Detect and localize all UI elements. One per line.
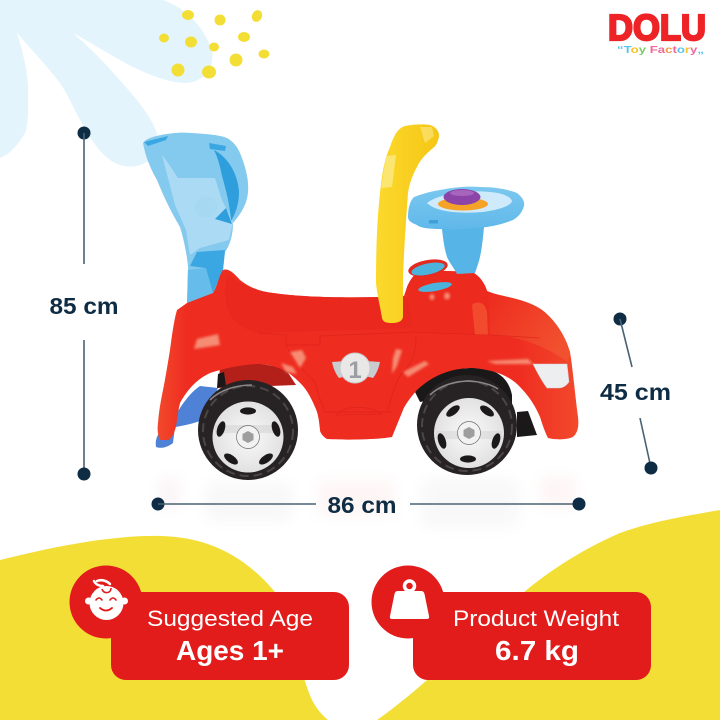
- body gloss highlights: [194, 292, 533, 377]
- winged number emblem: [332, 353, 380, 384]
- logo: Dolu Toy Factory: “T oy Fa ctory„: [617, 44, 704, 56]
- dimension: height 85 cm: 85 cm: [50, 293, 118, 319]
- dark inner rear wheel well: [218, 362, 296, 388]
- recessed red seat: [225, 274, 413, 333]
- blue steering column: [442, 227, 484, 274]
- card: suggested age: [70, 566, 349, 680]
- logo: Dolu Toy Factory: DOLU: [608, 7, 706, 48]
- toy ride-on car: [143, 124, 578, 480]
- card: suggested age: Suggested Age: [147, 606, 313, 631]
- rear wheel: [198, 380, 298, 480]
- bonnet panel: [487, 291, 570, 362]
- background: yellow wave bottom right: [377, 510, 720, 720]
- headlight: [533, 364, 569, 388]
- steering wheel: [408, 187, 524, 230]
- rear wheel-well shadow: [217, 372, 226, 388]
- red car body: [158, 269, 578, 440]
- card: product weight: Product Weight: [453, 606, 619, 631]
- rear blue platform: [156, 386, 218, 448]
- background: light blue flower petals: [0, 0, 212, 167]
- faint floor reflection of the toy: [158, 476, 576, 528]
- dimension: height to seat 45 cm: [600, 312, 671, 474]
- dimension: height to seat 45 cm: 45 cm: [600, 379, 671, 405]
- dimension: length 86 cm: [152, 492, 586, 518]
- decorative yellow dots: [159, 8, 270, 78]
- body crease lines: [258, 332, 540, 415]
- winged number emblem: 1: [348, 357, 362, 384]
- icon: baby face: [85, 580, 128, 620]
- card: product weight: [372, 566, 651, 680]
- front wheel: [417, 375, 517, 475]
- card: product weight: 6.7 kg: [495, 635, 579, 666]
- red dashboard console: [407, 270, 489, 335]
- speedometer dials: [407, 257, 452, 294]
- folding blue backrest: [143, 133, 248, 305]
- background: yellow wave bottom left: [0, 536, 328, 720]
- icon: kettlebell weight: [390, 581, 429, 619]
- yellow push handle: [376, 124, 439, 323]
- front wheel-well shadow: [415, 368, 512, 412]
- front foot pedal: [517, 411, 537, 437]
- dimension: length 86 cm: 86 cm: [328, 492, 396, 518]
- card: suggested age: Ages 1+: [176, 635, 284, 666]
- dimension: height 85 cm: [50, 126, 118, 480]
